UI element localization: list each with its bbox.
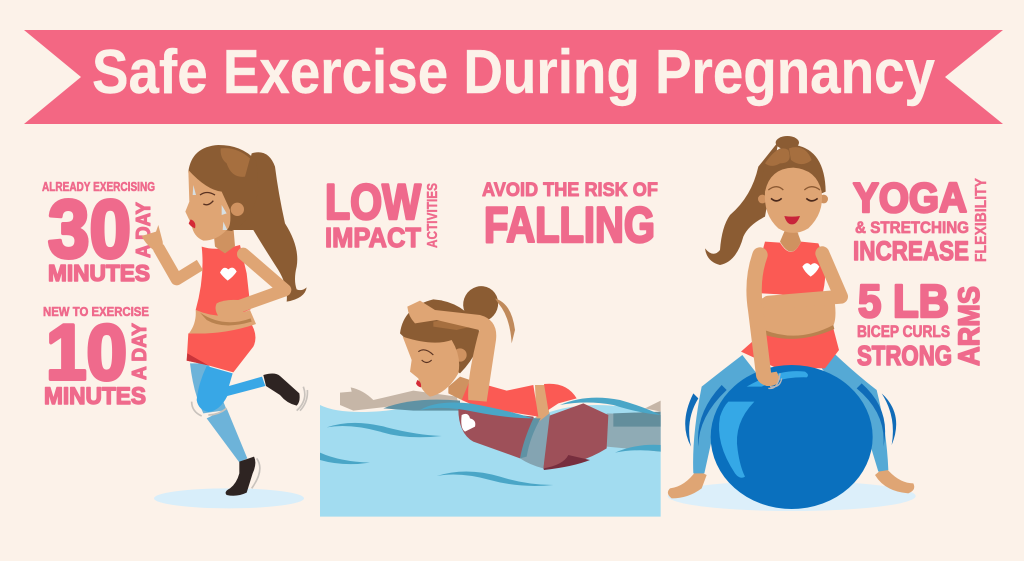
water ripples bbox=[320, 398, 661, 486]
water bbox=[320, 405, 661, 517]
illustration: pregnant woman jogging bbox=[142, 145, 307, 508]
text block: 5 lb bicep curls strong arms: BICEP CURLS bbox=[857, 323, 950, 341]
head bbox=[776, 136, 799, 149]
text block: new to exercise 10 minutes a day bbox=[43, 305, 151, 410]
text block: new to exercise 10 minutes a day: NEW TO EXERCISE bbox=[43, 305, 149, 319]
ponytail bbox=[233, 152, 307, 302]
text block: already exercising 30 minutes a day: 30 bbox=[48, 184, 131, 275]
text block: new to exercise 10 minutes a day: A DAY bbox=[129, 322, 151, 380]
text block: 5 lb bicep curls strong arms bbox=[857, 275, 986, 371]
text block: yoga and stretching increase flexibility bbox=[853, 174, 990, 266]
arms bbox=[754, 255, 764, 375]
text block: low impact activities: LOW bbox=[325, 174, 422, 230]
text block: avoid the risk of falling: FALLING bbox=[484, 197, 655, 253]
text block: new to exercise 10 minutes a day: MINUTES bbox=[44, 383, 146, 410]
text block: low impact activities: IMPACT bbox=[325, 222, 421, 253]
text block: yoga and stretching increase flexibility: FLEXIBILITY bbox=[973, 178, 990, 262]
text block: new to exercise 10 minutes a day: 10 bbox=[46, 308, 127, 396]
text block: low impact activities: ACTIVITIES bbox=[425, 183, 441, 248]
text block: 5 lb bicep curls strong arms: 5 LB bbox=[858, 275, 949, 327]
exercise ball bbox=[711, 365, 873, 509]
text block: already exercising 30 minutes a day: MINUTES bbox=[48, 260, 150, 286]
text block: 5 lb bicep curls strong arms: ARMS bbox=[953, 286, 986, 366]
torso bbox=[760, 242, 825, 297]
title banner bbox=[24, 30, 1003, 124]
ponytail bbox=[705, 142, 778, 265]
text block: yoga and stretching increase flexibility: INCREASE bbox=[853, 236, 969, 266]
title: Safe Exercise During Pregnancy bbox=[92, 38, 935, 107]
text block: yoga and stretching increase flexibility: & STRETCHING bbox=[855, 219, 969, 237]
text block: 5 lb bicep curls strong arms: STRONG bbox=[857, 340, 952, 371]
text block: avoid the risk of falling bbox=[482, 179, 658, 253]
bun bbox=[457, 280, 505, 328]
text block: already exercising 30 minutes a day: ALREADY EXERCISING bbox=[42, 180, 155, 194]
illustration: pregnant woman swimming bbox=[320, 280, 661, 517]
text block: yoga and stretching increase flexibility: YOGA bbox=[853, 174, 967, 221]
illustration: pregnant woman on exercise ball bbox=[668, 136, 916, 511]
text block: avoid the risk of falling: AVOID THE RISK OF bbox=[482, 179, 658, 201]
text block: already exercising 30 minutes a day: A DAY bbox=[133, 201, 155, 258]
arm bbox=[407, 301, 496, 402]
head bbox=[188, 145, 258, 231]
limbs bbox=[238, 254, 285, 307]
text block: already exercising 30 minutes a day bbox=[42, 180, 155, 286]
